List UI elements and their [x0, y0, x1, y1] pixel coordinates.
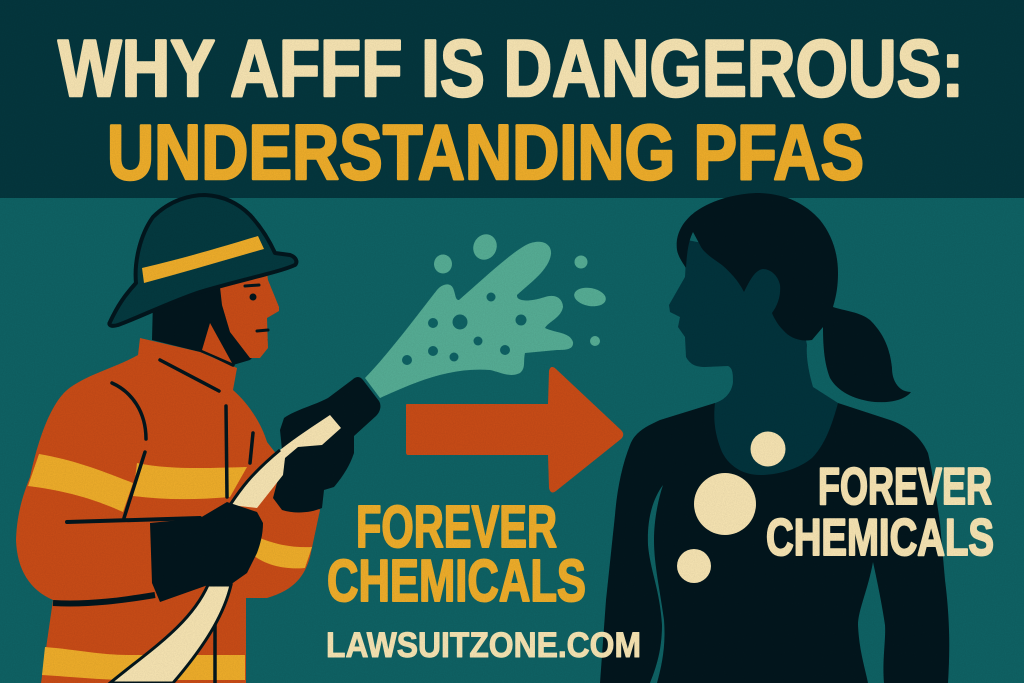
chemical dot large — [694, 473, 756, 535]
chemical dot small lower — [677, 549, 711, 583]
hood and neck — [152, 280, 268, 365]
lower glove — [150, 502, 263, 602]
lower hose — [110, 585, 231, 683]
title line 2: UNDERSTANDING PFAS — [107, 108, 864, 196]
neck skin — [202, 323, 232, 363]
helmet — [109, 195, 296, 326]
label: forever chemicals near firefighter: FOREVER — [356, 494, 557, 560]
website label: LAWSUITZONE.COM — [326, 626, 641, 665]
helmet band — [142, 236, 264, 283]
woman face and neck — [669, 240, 838, 475]
foam spray — [365, 230, 607, 398]
woman silhouette — [600, 193, 949, 683]
jacket stripe: chest — [133, 463, 247, 499]
chemical dot small upper — [750, 432, 786, 466]
eyebrow — [245, 285, 259, 286]
label: forever chemicals on woman — [766, 458, 994, 567]
eye — [250, 294, 256, 300]
gap under right arm — [858, 562, 885, 683]
arrow — [406, 367, 623, 492]
jacket stripe: wrist — [253, 537, 312, 568]
label: forever chemicals near firefighter — [327, 494, 586, 614]
foam bubbles — [402, 292, 526, 365]
jacket seams — [112, 350, 253, 683]
upper hose — [230, 415, 341, 508]
foam droplets — [434, 230, 607, 346]
woman hair and ponytail — [677, 193, 911, 402]
jacket stripe: hem — [42, 647, 245, 680]
mouth — [257, 330, 268, 331]
face — [220, 273, 279, 358]
jacket stripe: left arm — [28, 454, 133, 512]
woman torso — [600, 403, 949, 683]
nozzle and upper glove — [273, 377, 380, 512]
header band with title — [0, 0, 1024, 198]
jacket — [16, 338, 320, 683]
firefighter illustration — [16, 195, 380, 683]
label: forever chemicals near firefighter: CHEMICALS — [327, 548, 586, 614]
gap under left arm — [648, 485, 665, 683]
